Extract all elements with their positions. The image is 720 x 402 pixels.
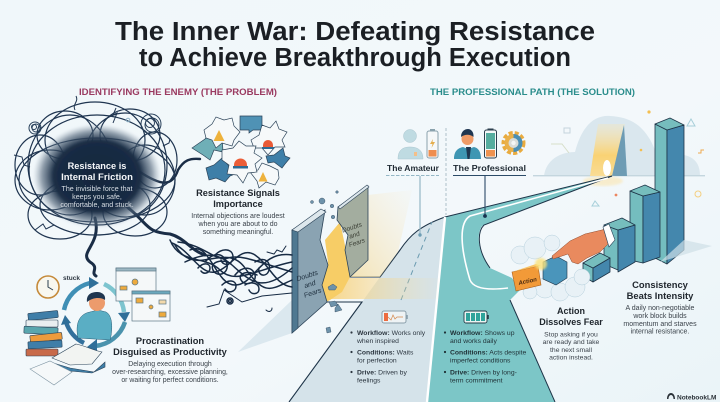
text: resistance is internal friction: comfortable, and stuck. [60, 201, 134, 209]
scribble loops [14, 96, 177, 239]
white bubbles [204, 117, 287, 188]
professional bullets: Drive: Driven by long- [450, 370, 517, 376]
text: procrastination disguised as productivity: Disguised as Productivity [113, 347, 228, 357]
icon: stressed person [77, 292, 112, 340]
wall left piece: Fears [303, 287, 323, 300]
logo: notebooklm [667, 393, 716, 402]
title: to Achieve Breakthrough Execution [139, 44, 571, 72]
wall rubble [310, 191, 342, 333]
tendrils [87, 159, 205, 276]
text: consistency beats intensity: A daily non-negotiable [626, 305, 695, 312]
wall shadow [238, 300, 292, 352]
professional road [427, 176, 612, 402]
heading: the professional path: THE PROFESSIONAL PATH (THE SOLUTION) [430, 87, 635, 97]
icon: gear [504, 133, 524, 153]
professional icons and label [453, 128, 526, 218]
text: action dissolves fear: Action [557, 306, 585, 316]
icon: action block: Action [517, 277, 538, 287]
icon: professional battery [484, 128, 496, 158]
amateur connector [386, 176, 439, 237]
text: consistency beats intensity: Consistency [632, 279, 689, 290]
icon: full battery [464, 311, 489, 323]
amateur bullets: for perfection [357, 358, 397, 364]
icon: amateur person [398, 130, 423, 159]
text: procrastination disguised as productivity [112, 336, 228, 384]
text: action dissolves fear [539, 306, 603, 362]
title [115, 18, 595, 72]
amateur icons and label [386, 129, 439, 237]
text: procrastination disguised as productivity: over-researching, excessive planning, [112, 369, 228, 376]
text: resistance is internal friction: Internal Friction [61, 172, 133, 183]
label: stuck: stuck [63, 275, 80, 282]
logo: notebooklm: NotebookLM [677, 394, 716, 402]
text: resistance is internal friction: keeps you safe, [72, 193, 122, 201]
text: procrastination disguised as productivity: or waiting for perfect conditions. [121, 377, 219, 384]
bar 3 [630, 185, 660, 263]
amateur bullets: Conditions: Waits [357, 350, 414, 356]
icon: pointing hand [552, 224, 615, 264]
text: consistency beats intensity: Beats Intensity [627, 290, 694, 301]
text: resistance signals importance: Resistance Signals [196, 188, 280, 198]
text: procrastination disguised as productivity: Delaying execution through [128, 361, 212, 368]
tangled lines to the wall [170, 240, 292, 311]
professional bullets: Workflow: Shows up [450, 330, 515, 337]
divider between amateur and professional [445, 128, 447, 215]
text: consistency beats intensity: work block builds [632, 313, 687, 320]
title: The Inner War: Defeating Resistance [115, 18, 595, 46]
text: procrastination disguised as productivity: Procrastination [136, 336, 204, 346]
text: resistance is internal friction: The invisible force that [62, 185, 133, 193]
panel: procrastination illustration [24, 268, 170, 385]
icon: cycle arrows [61, 277, 130, 352]
blue burst shapes [192, 116, 290, 182]
text: resistance is internal friction [60, 161, 134, 209]
heading: identifying the enemy: IDENTIFYING THE ENEMY (THE PROBLEM) [79, 87, 277, 97]
wall right piece: and [348, 230, 361, 241]
alarm icons [214, 130, 274, 182]
icon: professional person [454, 129, 481, 159]
shadow beside bars [660, 240, 712, 262]
text: action dissolves fear: are ready and take [543, 339, 600, 346]
wall right piece: Doubts [341, 221, 364, 234]
professional bullets: imperfect conditions [450, 358, 511, 364]
text: resistance signals importance: when you are about to do [197, 221, 278, 228]
text: action dissolves fear: action instead. [549, 354, 593, 362]
icon: clock [37, 276, 59, 298]
icon: flow windows [116, 268, 170, 321]
panel: internal friction scribble [14, 96, 205, 276]
small scribble balls [29, 114, 161, 134]
text: action dissolves fear: Dissolves Fear [539, 317, 603, 327]
text: consistency beats intensity [623, 279, 697, 336]
chart: rising bars [583, 118, 684, 282]
dark core [33, 124, 161, 228]
amateur bullets: feelings [357, 378, 381, 384]
wall right piece [337, 185, 369, 277]
professional bullets: and works daily [450, 338, 497, 345]
professional bullets: Conditions: Acts despite [450, 350, 527, 356]
icon: book stack [24, 310, 62, 356]
professional details [444, 311, 527, 384]
panel: horizon with hills and doorway [533, 110, 705, 206]
text: resistance signals importance: Importance [213, 199, 263, 209]
amateur road edge and dashes [289, 217, 445, 402]
professional bullets: term commitment [450, 378, 503, 384]
icon: amateur battery [427, 129, 438, 158]
icon: action block [512, 258, 547, 291]
amateur bullets: Drive: Driven by [357, 370, 407, 376]
block being pressed [543, 256, 567, 285]
wall right piece: Fears [348, 237, 367, 249]
text: resistance signals importance: Internal objections are loudest [191, 213, 285, 220]
text: resistance signals importance: something meaningful. [203, 229, 273, 236]
light beam through the wall [322, 190, 442, 302]
amateur road [289, 217, 445, 402]
bar 2 [604, 218, 635, 272]
wall left piece: and [303, 279, 318, 290]
bar 4 tall [655, 118, 684, 264]
amateur bullets [350, 330, 426, 384]
amateur details [350, 311, 426, 384]
text: consistency beats intensity: momentum and starves [623, 321, 697, 328]
label: the professional: The Professional [453, 164, 526, 173]
wall left piece [292, 209, 328, 333]
icon: weak battery [382, 311, 408, 323]
label: the amateur: The Amateur [387, 164, 439, 173]
panel: warning signals [192, 116, 290, 188]
wall: doubts and fears [292, 185, 369, 333]
cloud of dissolving fear [511, 235, 590, 301]
professional connector [453, 176, 526, 218]
text: action dissolves fear: Stop asking if you [544, 332, 598, 338]
text: resistance signals importance [191, 188, 285, 236]
bar 1 [583, 253, 610, 282]
icon: map sheet [30, 361, 72, 385]
text: resistance is internal friction: Resistance is [68, 161, 126, 171]
amateur bullets: when inspired [356, 338, 399, 345]
text: consistency beats intensity: internal resistance. [631, 328, 689, 336]
icon: open book [50, 344, 105, 373]
wall left piece: Doubts [296, 269, 319, 283]
amateur bullets: Workflow: Works only [357, 330, 426, 337]
professional bullets [444, 330, 527, 384]
text: action dissolves fear: the next small [550, 347, 592, 354]
